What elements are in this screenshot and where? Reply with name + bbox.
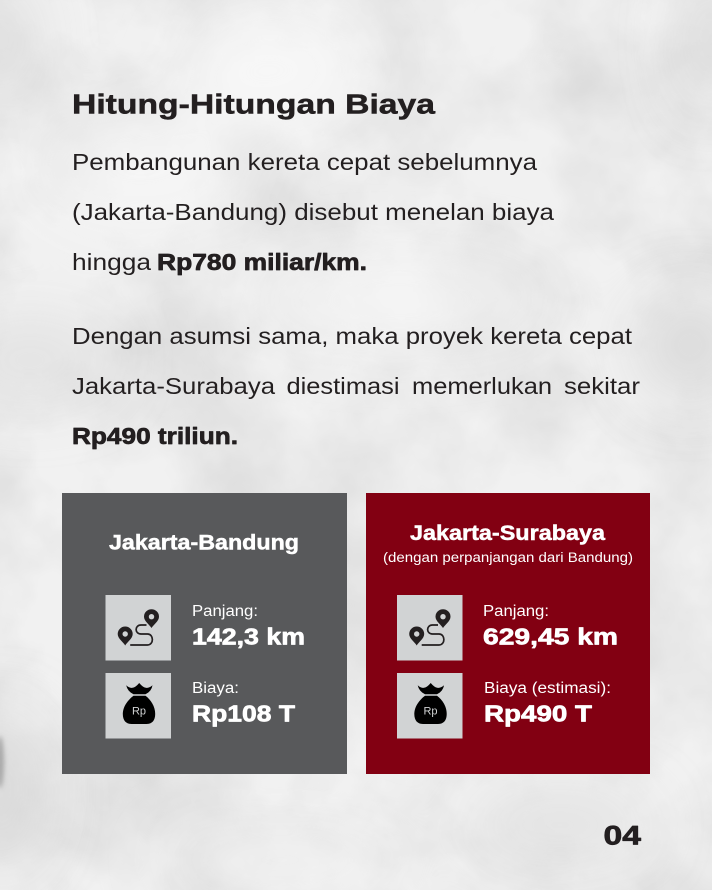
text block: first paragraph	[72, 149, 554, 275]
panel: Jakarta-Bandung	[62, 493, 347, 774]
icon: money bag: Rp	[423, 706, 438, 718]
text block: second paragraph: diestimasi	[286, 373, 400, 399]
cost label and value: Biaya:	[192, 680, 239, 697]
page number: 04	[604, 821, 641, 851]
cost label and value: Rp490 T	[484, 700, 593, 726]
cost label and value: Biaya (estimasi):	[484, 680, 611, 697]
cost label and value: Rp108 T	[192, 700, 296, 726]
panel heading: Jakarta-Surabaya: (dengan perpanjangan dari Bandung)	[383, 550, 633, 565]
text block: second paragraph: Jakarta-Surabaya	[72, 373, 275, 399]
length label and value: 142,3 km	[192, 623, 305, 649]
text block: first paragraph: Pembangunan kereta cepat sebelumnya	[72, 149, 537, 175]
text block: second paragraph: Dengan asumsi sama, maka proyek kereta cepat	[72, 323, 633, 349]
text block: second paragraph	[72, 323, 640, 449]
panel: Jakarta-Surabaya	[366, 493, 650, 774]
text block: first paragraph: (Jakarta-Bandung) disebut menelan biaya	[72, 199, 554, 225]
length label and value	[192, 603, 305, 649]
icon: money bag	[397, 673, 462, 738]
icon: money bag: Rp	[132, 706, 146, 718]
cost label and value	[192, 680, 296, 726]
icon: route	[106, 595, 171, 660]
length label and value: 629,45 km	[483, 623, 618, 649]
text block: second paragraph: memerlukan	[412, 373, 552, 399]
panel heading: Jakarta-Bandung: Jakarta-Bandung	[109, 532, 299, 554]
length label and value: Panjang:	[483, 603, 549, 620]
text block: second paragraph: Rp490 triliun.	[72, 423, 238, 449]
title: Hitung-Hitungan Biaya	[72, 88, 436, 120]
panel heading: Jakarta-Surabaya	[383, 522, 633, 565]
text block: first paragraph: Rp780 miliar/km.	[157, 249, 367, 275]
icon: money bag	[106, 673, 171, 738]
text block: first paragraph: hingga	[72, 249, 151, 275]
cost label and value	[484, 680, 611, 726]
length label and value: Panjang:	[192, 603, 258, 620]
panel heading: Jakarta-Surabaya: Jakarta-Surabaya	[410, 522, 605, 545]
length label and value	[483, 603, 618, 649]
icon: route	[397, 595, 462, 660]
text block: second paragraph: sekitar	[564, 373, 640, 399]
